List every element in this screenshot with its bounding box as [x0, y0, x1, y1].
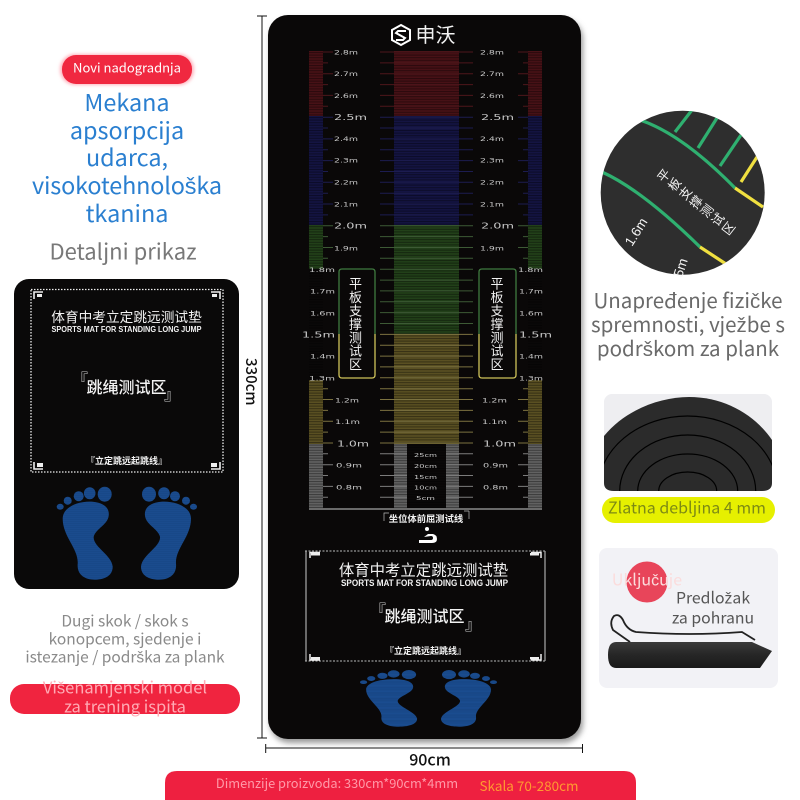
scale labels: right: 1.8m: [518, 267, 543, 274]
text: fitness benefit: spremnosti, vježbe s: [591, 308, 785, 338]
scale labels: right: 2.2m: [480, 180, 504, 186]
product dimensions: Dimenzije proizvoda: 330cm*90cm*4mm: [216, 773, 458, 792]
plank zone: right: 撑: [490, 314, 504, 333]
plank zone: left: [339, 269, 375, 378]
panel: detail mat view: [14, 279, 239, 589]
plank zone: left: 测: [349, 328, 362, 346]
rotated zone text: 撑: [684, 190, 707, 212]
panel title: 体育中考立定跳远测试垫: [51, 306, 202, 326]
skipping rope zone label: 『: [72, 366, 88, 390]
scale labels: right: 1.0m: [483, 440, 516, 448]
rotated zone text: 支: [673, 181, 696, 203]
centre labels: sit and reach cm: 20cm: [414, 464, 437, 470]
text: exercise list: istezanje / podrška za plank: [25, 646, 225, 668]
scale labels: left: 1.0m: [337, 440, 369, 448]
text: exercise list: konopcem, sjedenje i: [49, 628, 201, 650]
scale labels: left: 2.2m: [334, 180, 358, 186]
scale labels: right: 0.9m: [483, 462, 508, 470]
detail photo: plank zone circle: [601, 110, 765, 279]
scale labels: left: 1.1m: [335, 419, 360, 426]
subheading: Detaljni prikaz: Detaljni prikaz: [49, 234, 197, 266]
heading: Mekana apsorpcija: udarca,: [86, 139, 168, 173]
badge: Novi nadogradnja: Novi nadogradnja: [73, 58, 181, 76]
scale labels: right: 2.4m: [480, 136, 504, 143]
box subtitle: SPORTS MAT FOR STANDING LONG JUMP: [341, 578, 508, 588]
scale labels: right: 1.1m: [482, 419, 507, 426]
centre labels: sit and reach cm: 5cm: [416, 496, 435, 502]
centre labels: sit and reach cm: 10cm: [414, 486, 437, 492]
scale labels: left: 1.2m: [335, 398, 359, 404]
icon: footprints: [360, 670, 497, 727]
skipping rope zone label: 』: [465, 611, 481, 635]
bag label: [672, 586, 754, 628]
heading: Mekana apsorpcija: Mekana: [84, 84, 170, 118]
detail photo: mat thickness: [604, 394, 772, 491]
text: exercise list: [25, 610, 225, 668]
rotated zone text: [652, 164, 739, 239]
scale labels: right: 2.3m: [480, 158, 504, 164]
badge: 4 mm thickness: Zlatna debljina 4 mm: [608, 494, 766, 518]
scale labels: right: 1.9m: [480, 246, 504, 252]
text: exercise list: Dugi skok / skok s: [61, 610, 189, 632]
scale labels: right: 2.7m: [480, 71, 504, 78]
skipping rope zone label: 『: [370, 597, 386, 621]
scale labels: right: 2.1m: [480, 202, 504, 208]
scale labels: left: 2.7m: [334, 71, 358, 78]
stripes: right band: [528, 51, 542, 508]
box title: 体育中考立定跳远测试垫: [339, 558, 508, 580]
scale labels: left: 2.5m: [334, 113, 367, 122]
scale labels: left: 2.0m: [334, 222, 367, 230]
scale range: Skala 70-280cm: [480, 775, 578, 795]
plank zone: left: 支: [349, 300, 362, 320]
heading: Mekana apsorpcija: tkanina: [86, 195, 168, 229]
scale labels: right: 2.6m: [480, 93, 504, 100]
dimension: width 90cm: 90cm: [409, 746, 451, 770]
plank zone: left: 试: [349, 340, 362, 360]
heading: Mekana apsorpcija: [32, 84, 222, 229]
plank zone: right: [479, 269, 516, 378]
scale labels: left: 1.4m: [310, 354, 335, 360]
plank zone: right: 板: [490, 287, 504, 306]
scale labels: right: 0.8m: [483, 484, 508, 492]
plank zone: left: 平: [349, 274, 362, 292]
stripes: centre band: [394, 51, 459, 508]
panel: main mat: [268, 15, 581, 739]
stripes: left band: [309, 51, 323, 508]
logo: [392, 19, 456, 48]
scale labels: left: 2.1m: [334, 202, 358, 208]
text: fitness benefit: [591, 284, 785, 362]
scale labels: left: 1.5m: [302, 330, 335, 340]
scale labels: left: [302, 50, 369, 492]
plank zone: right: 试: [490, 340, 504, 360]
start line label: 『立定跳远起跳线』: [86, 454, 167, 467]
scale labels: left: 2.4m: [334, 136, 358, 143]
plank zone: right: 支: [490, 300, 504, 320]
plank zone: left: 区: [349, 354, 362, 373]
scale labels: right: 2.8m: [480, 50, 504, 56]
scale labels: left: 0.9m: [336, 462, 362, 470]
rotated zone text: 平: [652, 164, 674, 186]
sit and reach line label: 坐位体前屈测试线: [389, 511, 464, 525]
5m label: 5m: [671, 256, 691, 279]
start line label: 『立定跳远起跳线』: [385, 644, 466, 657]
footer bar: [165, 771, 636, 800]
scale labels: right: 2.5m: [481, 113, 514, 122]
scale labels: left: 1.8m: [309, 267, 335, 274]
plank zone: left: 板: [349, 287, 362, 306]
badge: multipurpose model: za trening ispita: [64, 694, 186, 718]
plank zone: right: 平: [490, 274, 504, 292]
red circle badge: [612, 562, 682, 602]
panel: start zone box: [305, 551, 545, 661]
scale labels: left: 0.8m: [336, 484, 362, 492]
bag label: za pohranu: [672, 606, 754, 628]
bag label: Predložak: [676, 586, 750, 608]
icon: bag: [608, 615, 772, 668]
scale labels: left: 1.3m: [309, 376, 335, 382]
tick marks: [309, 52, 542, 509]
skipping rope zone label: 』: [164, 381, 180, 405]
scale labels: left: 2.6m: [334, 93, 358, 100]
scale labels: left: 1.6m: [310, 310, 335, 318]
badge: multipurpose model: Višenamjenski model: [43, 674, 207, 698]
text: fitness benefit: podrškom za plank: [597, 332, 780, 362]
icon: seated person: [419, 527, 437, 543]
skipping rope zone label: 跳绳测试区: [384, 603, 465, 627]
icon: footprints: [57, 487, 197, 580]
plank zone: left: 撑: [349, 314, 362, 333]
scale labels: right: 1.3m: [519, 376, 543, 382]
scale labels: left: 1.9m: [334, 246, 358, 252]
scale labels: right: 1.2m: [482, 398, 507, 404]
scale labels: right: 1.5m: [519, 330, 552, 340]
badge: Novi nadogradnja: [60, 54, 194, 85]
scale labels: right: [480, 50, 552, 492]
rotated zone text: 试: [706, 208, 729, 230]
rotated zone text: 测: [695, 199, 718, 221]
centre labels: sit and reach cm: 25cm: [414, 453, 437, 459]
dimension: width 90cm: [266, 744, 582, 770]
dimension: height 330cm: 330cm: [241, 358, 262, 406]
heading: Mekana apsorpcija: apsorpcija: [70, 112, 184, 146]
red circle badge: Uključuje: [612, 566, 682, 590]
scale labels: left: 1.7m: [310, 288, 335, 296]
logo: 申沃: [416, 19, 456, 48]
plank zone: right: 区: [490, 354, 504, 373]
dimension: height 330cm: [241, 16, 267, 738]
centre labels: sit and reach cm: 15cm: [414, 475, 437, 481]
1.6m label: 1.6m: [622, 215, 650, 249]
skipping rope zone label: 跳绳测试区: [86, 374, 167, 398]
scale labels: left: 2.8m: [334, 50, 358, 56]
text: fitness benefit: Unapređenje fizičke: [594, 284, 782, 314]
skipping rope zone label: [72, 366, 180, 405]
scale labels: right: 1.4m: [519, 354, 543, 360]
rotated zone text: 板: [662, 173, 685, 195]
scale labels: right: 1.6m: [519, 310, 543, 318]
heading: Mekana apsorpcija: visokotehnološka: [32, 167, 222, 201]
mat shadow: [270, 19, 583, 743]
scale labels: left: 2.3m: [334, 158, 358, 164]
panel: storage bag: [599, 548, 778, 688]
badge: multipurpose model: [10, 674, 240, 718]
scale labels: right: 2.0m: [481, 222, 514, 230]
skipping rope zone label: [370, 597, 481, 635]
panel subtitle: SPORTS MAT FOR STANDING LONG JUMP: [52, 325, 202, 334]
centre labels: sit and reach cm: [414, 453, 437, 502]
rotated zone text: 区: [716, 217, 739, 239]
scale labels: right: 1.7m: [519, 288, 543, 296]
plank zone: right: 测: [490, 328, 504, 346]
